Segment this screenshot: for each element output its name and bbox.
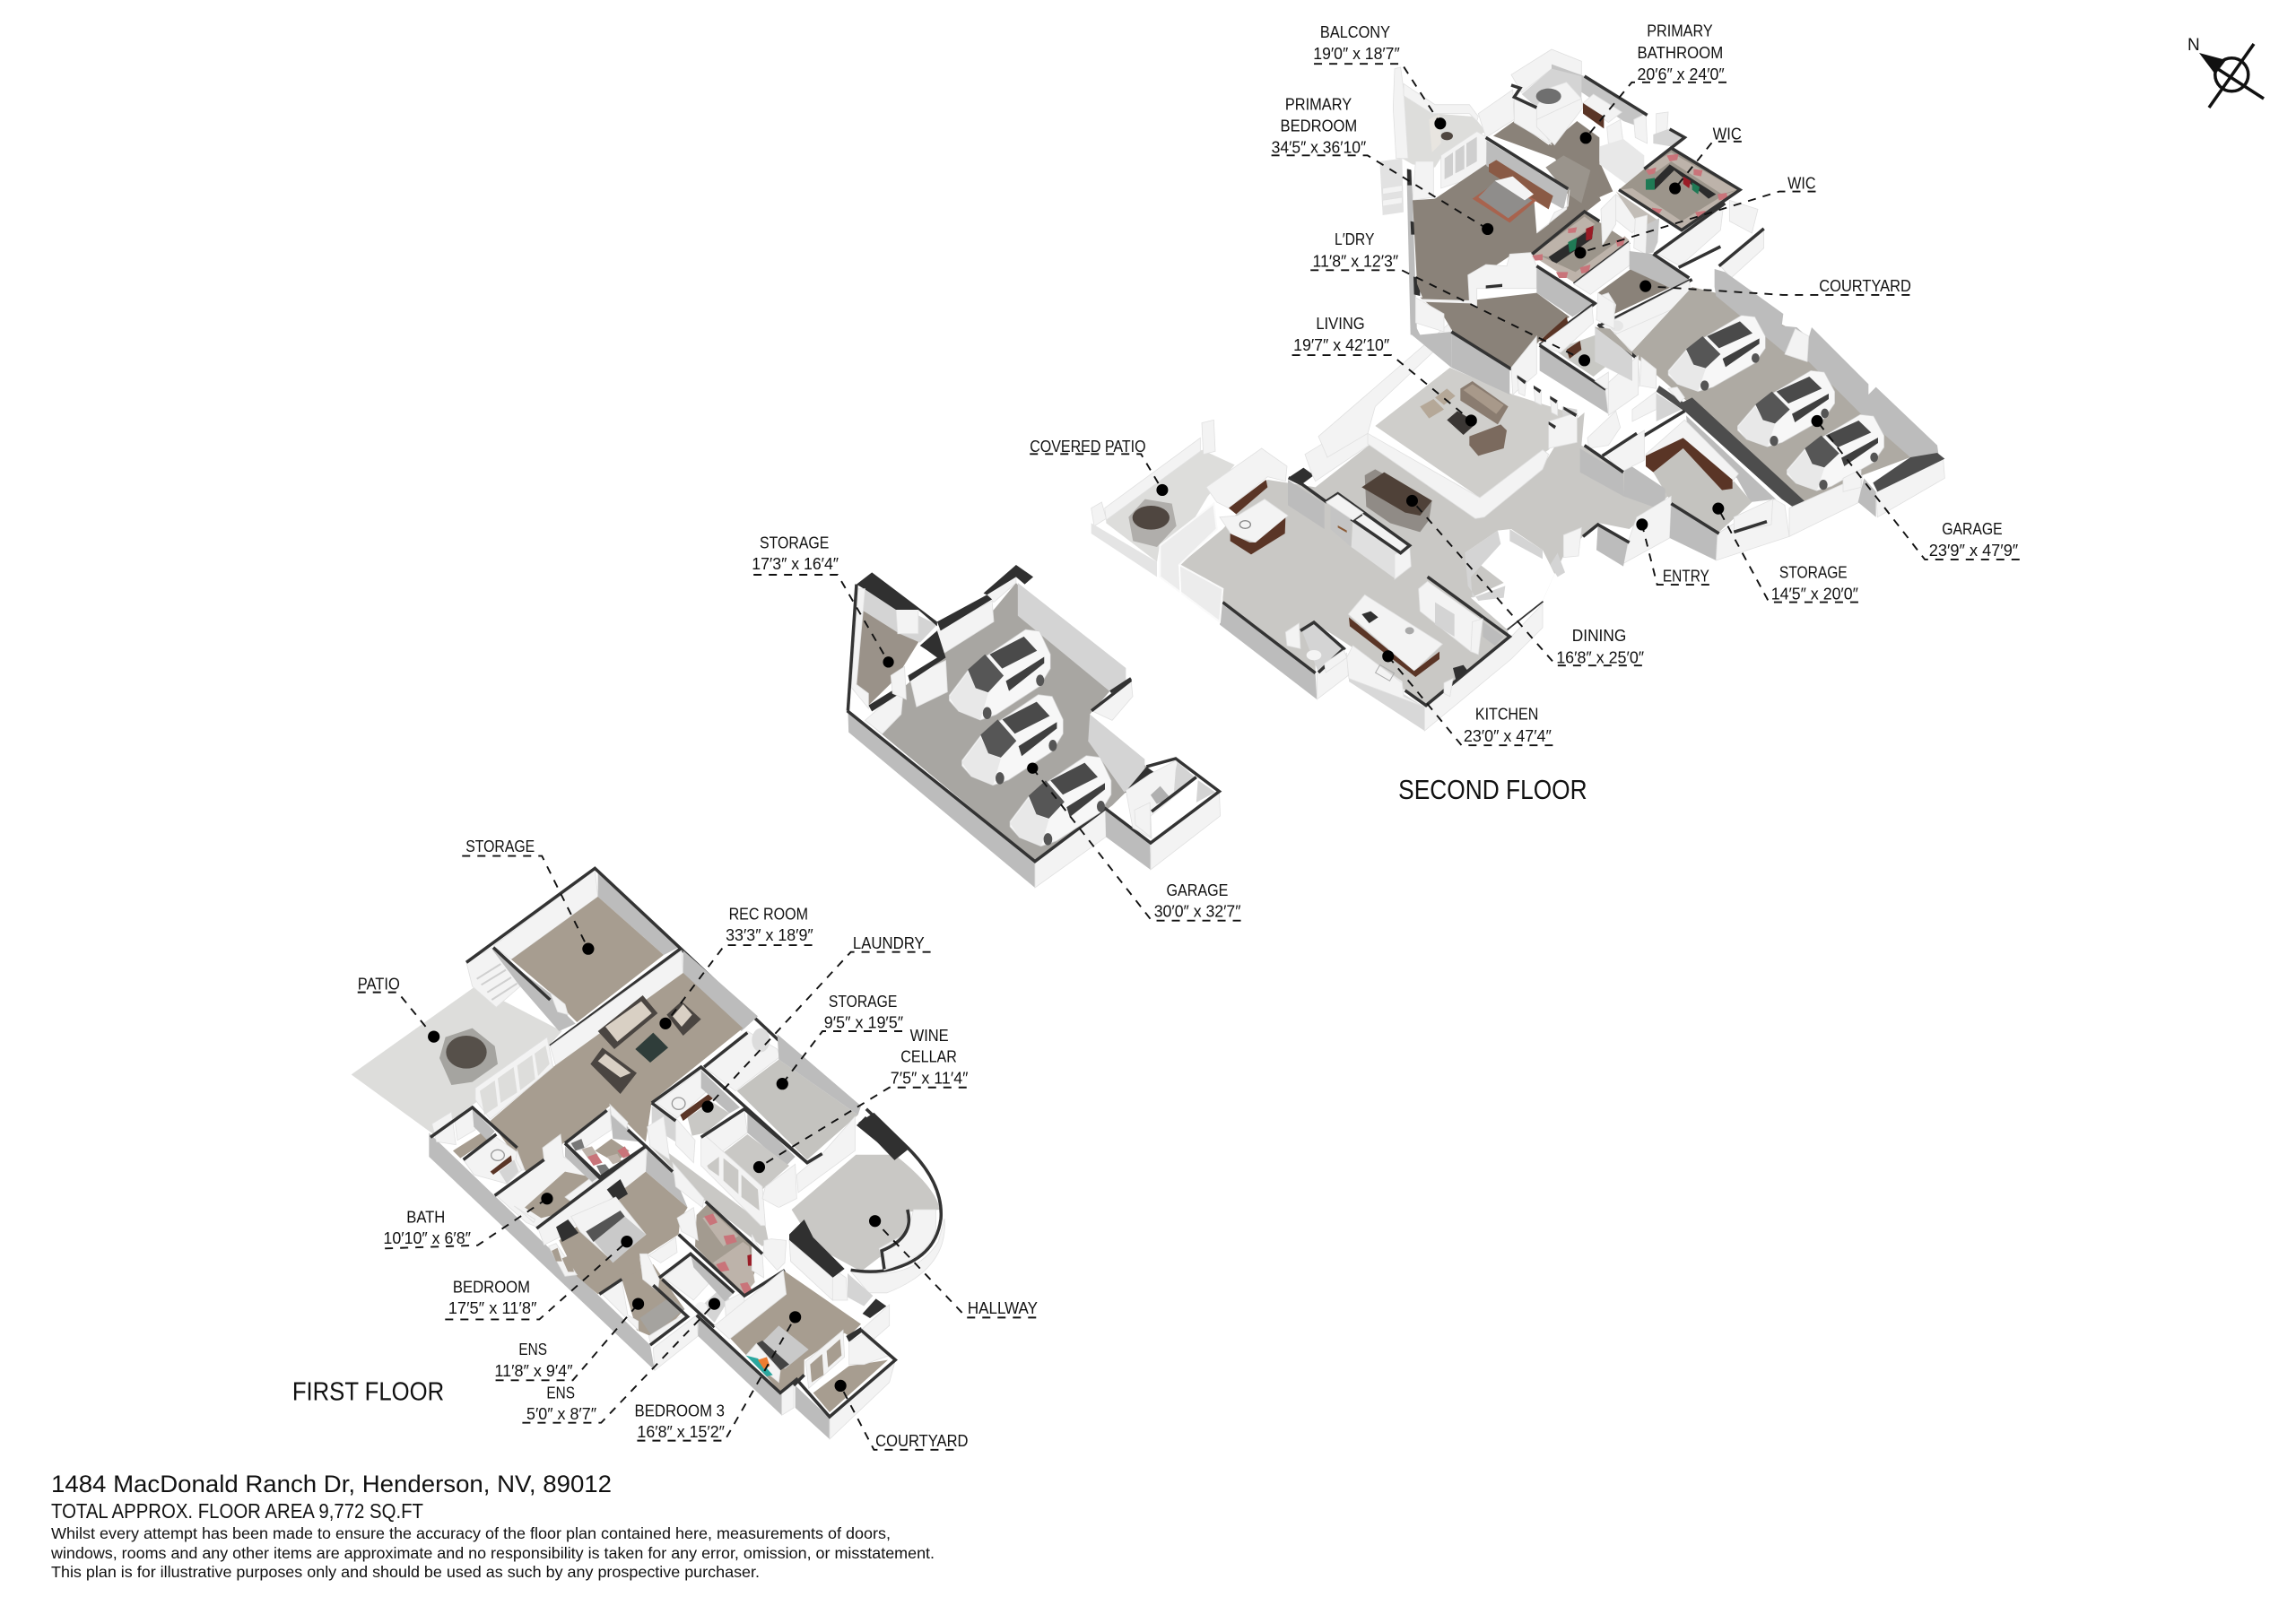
address: 1484 MacDonald Ranch Dr, Henderson, NV, 89012	[51, 1471, 612, 1497]
storage room	[848, 565, 1033, 711]
label: laundry: 11′8″ x 12′3″	[1313, 251, 1398, 271]
label: rec room	[659, 906, 813, 1029]
garage walls	[848, 568, 1219, 862]
panel: lower garage and storage	[752, 534, 1241, 921]
icon: north compass: N	[2187, 36, 2200, 55]
exterior walls	[1220, 577, 1543, 731]
label: living: LIVING	[1316, 314, 1365, 333]
panel: second floor drawing - kitchen and dining	[1091, 412, 1668, 731]
dining table	[1361, 469, 1432, 532]
label: primary bathroom: 20′6″ x 24′0″	[1638, 65, 1725, 83]
label: dining: 16′8″ x 25′0″	[1556, 647, 1644, 667]
cars	[949, 629, 1111, 846]
glass doors by patio	[1160, 448, 1287, 621]
label: balcony	[1313, 22, 1446, 129]
powder, storage and cellar rooms	[648, 1028, 897, 1300]
label: laundry	[701, 934, 931, 1113]
label: primary bedroom: 34′5″ x 36′10″	[1272, 138, 1366, 157]
label: bedroom 3	[635, 1311, 801, 1442]
label: storage: STORAGE	[829, 993, 897, 1011]
hallway stair	[879, 1210, 935, 1270]
balcony	[1379, 67, 1514, 334]
garage exterior faces	[848, 680, 1221, 888]
label: kitchen: 23′0″ x 47′4″	[1464, 726, 1552, 745]
label: rec room: REC ROOM	[729, 906, 808, 924]
linen closet	[565, 1105, 646, 1177]
label: storage	[752, 534, 894, 667]
hallway wall outline	[851, 1109, 941, 1271]
label: dining	[1406, 495, 1644, 667]
living platform	[1318, 323, 1578, 518]
label: storage: STORAGE	[760, 534, 829, 552]
label: courtyard: COURTYARD	[1819, 276, 1911, 295]
label: walk-in closet one: WIC	[1713, 125, 1742, 143]
label: ensuite one: ENS	[518, 1341, 547, 1359]
label: bedroom	[445, 1236, 633, 1319]
third bedroom	[715, 1237, 886, 1392]
disclaimer: This plan is for illustrative purposes only and should be used as such by any prospective purchaser.	[51, 1563, 760, 1581]
label: balcony: 19′0″ x 18′7″	[1313, 44, 1400, 63]
label: storage: 14′5″ x 20′0″	[1771, 585, 1858, 603]
disclaimer: windows, rooms and any other items are approximate and no responsibility is taken for any error, omission, or misstatement.	[50, 1544, 935, 1562]
label: storage	[777, 993, 903, 1089]
storage room drawing	[466, 868, 807, 1067]
label: primary bathroom	[1580, 22, 1726, 143]
clothing closet	[677, 1202, 785, 1298]
label: primary bedroom	[1272, 94, 1493, 235]
west exterior	[429, 1133, 895, 1439]
label: ensuite two: 5′0″ x 8′7″	[526, 1405, 596, 1424]
label: storage: STORAGE	[465, 838, 535, 856]
dining walls and cabinet	[1288, 424, 1411, 579]
icon: north compass	[2187, 36, 2264, 108]
main floor	[1179, 412, 1668, 706]
entry and front walls	[1550, 453, 1944, 577]
label: garage	[1027, 762, 1241, 921]
label: courtyard	[1639, 276, 1911, 295]
label: balcony: BALCONY	[1320, 22, 1390, 41]
label: ensuite one	[494, 1298, 644, 1381]
heading: second floor: SECOND FLOOR	[1398, 774, 1587, 805]
panel: first floor drawing - upper	[352, 868, 807, 1172]
label: dining: DINING	[1572, 626, 1626, 645]
label: walk-in closet two	[1574, 174, 1815, 258]
living room furniture	[1420, 381, 1509, 456]
second ensuite	[659, 1254, 744, 1330]
label: patio: PATIO	[358, 976, 400, 994]
label: bedroom 3: BEDROOM 3	[635, 1402, 725, 1420]
bedroom ensuite	[599, 1237, 688, 1345]
powder room	[1285, 622, 1347, 673]
label: ensuite two	[522, 1298, 720, 1424]
main bedroom	[536, 1146, 704, 1294]
panel: second floor drawing - garage and entry	[1550, 269, 1944, 577]
garage floor	[865, 583, 1146, 861]
label: storage: 9′5″ x 19′5″	[824, 1013, 903, 1032]
hallway curved wall base	[851, 1219, 944, 1293]
primary bathroom	[1511, 49, 1684, 204]
label: garage: GARAGE	[1167, 881, 1228, 900]
label: kitchen: KITCHEN	[1475, 704, 1538, 724]
walk-in closet two	[1532, 195, 1659, 294]
label: entry	[1636, 518, 1709, 586]
upper garage floor and walls	[1631, 269, 1939, 509]
upper brown floors	[1413, 121, 1688, 370]
label: storage	[462, 838, 594, 955]
label: laundry: LAUNDRY	[853, 934, 925, 953]
primary bedroom	[1473, 137, 1570, 233]
label: ensuite two: ENS	[546, 1384, 575, 1402]
label: bath: 10′10″ x 6′8″	[383, 1229, 471, 1248]
hallway floor	[792, 1155, 940, 1271]
label: entry: ENTRY	[1663, 567, 1709, 586]
patio	[352, 948, 562, 1134]
bath room	[495, 1134, 599, 1227]
label: courtyard: COURTYARD	[875, 1432, 968, 1451]
label: wine cellar	[753, 1027, 969, 1173]
label: covered patio	[1030, 437, 1168, 496]
label: primary bathroom: BATHROOM	[1638, 43, 1723, 62]
laundry room	[1518, 307, 1639, 448]
label: kitchen	[1382, 650, 1552, 745]
cars	[1668, 316, 1884, 490]
label: hallway	[869, 1215, 1038, 1317]
label: laundry	[1310, 230, 1590, 366]
label: bedroom 3: 16′8″ x 15′2″	[637, 1423, 725, 1442]
panel: first floor drawing - lower	[429, 1028, 897, 1439]
disclaimer	[50, 1524, 935, 1581]
label: garage	[1812, 415, 2020, 560]
rec room	[475, 950, 758, 1172]
label: patio	[358, 976, 439, 1043]
powder and bath at patio	[430, 1106, 525, 1184]
panel: first floor hallway drawing	[792, 1109, 944, 1293]
walk-in closet one	[1603, 148, 1740, 233]
label: covered patio: COVERED PATIO	[1030, 437, 1146, 456]
kitchen island and cabinets	[1347, 581, 1504, 707]
label: wine cellar: WINE	[910, 1027, 949, 1046]
label: rec room: 33′3″ x 18′9″	[726, 926, 813, 945]
stair void with railing	[1465, 529, 1554, 629]
disclaimer: Whilst every attempt has been made to ensure the accuracy of the floor plan contained here, measurements of doors,	[51, 1524, 891, 1542]
hallway inner stair edge	[882, 1210, 909, 1269]
label: walk-in closet one	[1669, 125, 1742, 195]
label: living	[1292, 314, 1477, 427]
label: primary bedroom: PRIMARY	[1285, 94, 1352, 114]
label: garage: 23′9″ x 47′9″	[1929, 541, 2019, 560]
label: courtyard	[835, 1380, 968, 1451]
label: bedroom: 17′5″ x 11′8″	[448, 1299, 537, 1317]
label: garage: 30′0″ x 32′7″	[1154, 903, 1241, 921]
panel: second floor drawing - upper rooms	[1318, 49, 1764, 518]
hallway dark corner	[858, 1113, 910, 1160]
label: storage: STORAGE	[1779, 563, 1848, 582]
label: bath	[383, 1193, 553, 1248]
label: bath: BATH	[406, 1208, 445, 1227]
storage room and cabinet	[1580, 392, 1776, 532]
label: storage	[1712, 503, 1858, 603]
interior walls near living	[1595, 293, 1657, 415]
panel: second floor labels	[1030, 22, 2020, 805]
label: garage: GARAGE	[1942, 519, 2003, 538]
courtyard	[697, 1315, 895, 1417]
label: bedroom: BEDROOM	[453, 1278, 530, 1297]
label: wine cellar: CELLAR	[900, 1048, 957, 1066]
total area: TOTAL APPROX. FLOOR AREA 9,772 SQ.FT	[51, 1499, 423, 1523]
stairs and corridor walls	[1411, 253, 1595, 395]
covered patio drawing	[1091, 420, 1235, 577]
label: laundry: L′DRY	[1335, 230, 1374, 248]
label: wine cellar: 7′5″ x 11′4″	[891, 1070, 969, 1088]
label: hallway: HALLWAY	[968, 1299, 1038, 1317]
east walls and courtyard	[1595, 200, 1764, 378]
label: storage: 17′3″ x 16′4″	[752, 555, 839, 574]
corridor	[648, 1145, 769, 1246]
kitchen bar counter	[1220, 480, 1288, 554]
label: living: 19′7″ x 42′10″	[1293, 335, 1390, 354]
label: primary bedroom: BEDROOM	[1281, 116, 1357, 135]
label: ensuite one: 11′8″ x 9′4″	[494, 1362, 573, 1381]
heading: first floor: FIRST FLOOR	[292, 1376, 444, 1406]
panel: first floor labels	[292, 838, 1038, 1451]
footer: address and disclaimer	[50, 1471, 935, 1581]
label: walk-in closet two: WIC	[1787, 174, 1815, 193]
label: primary bathroom: PRIMARY	[1647, 22, 1713, 40]
